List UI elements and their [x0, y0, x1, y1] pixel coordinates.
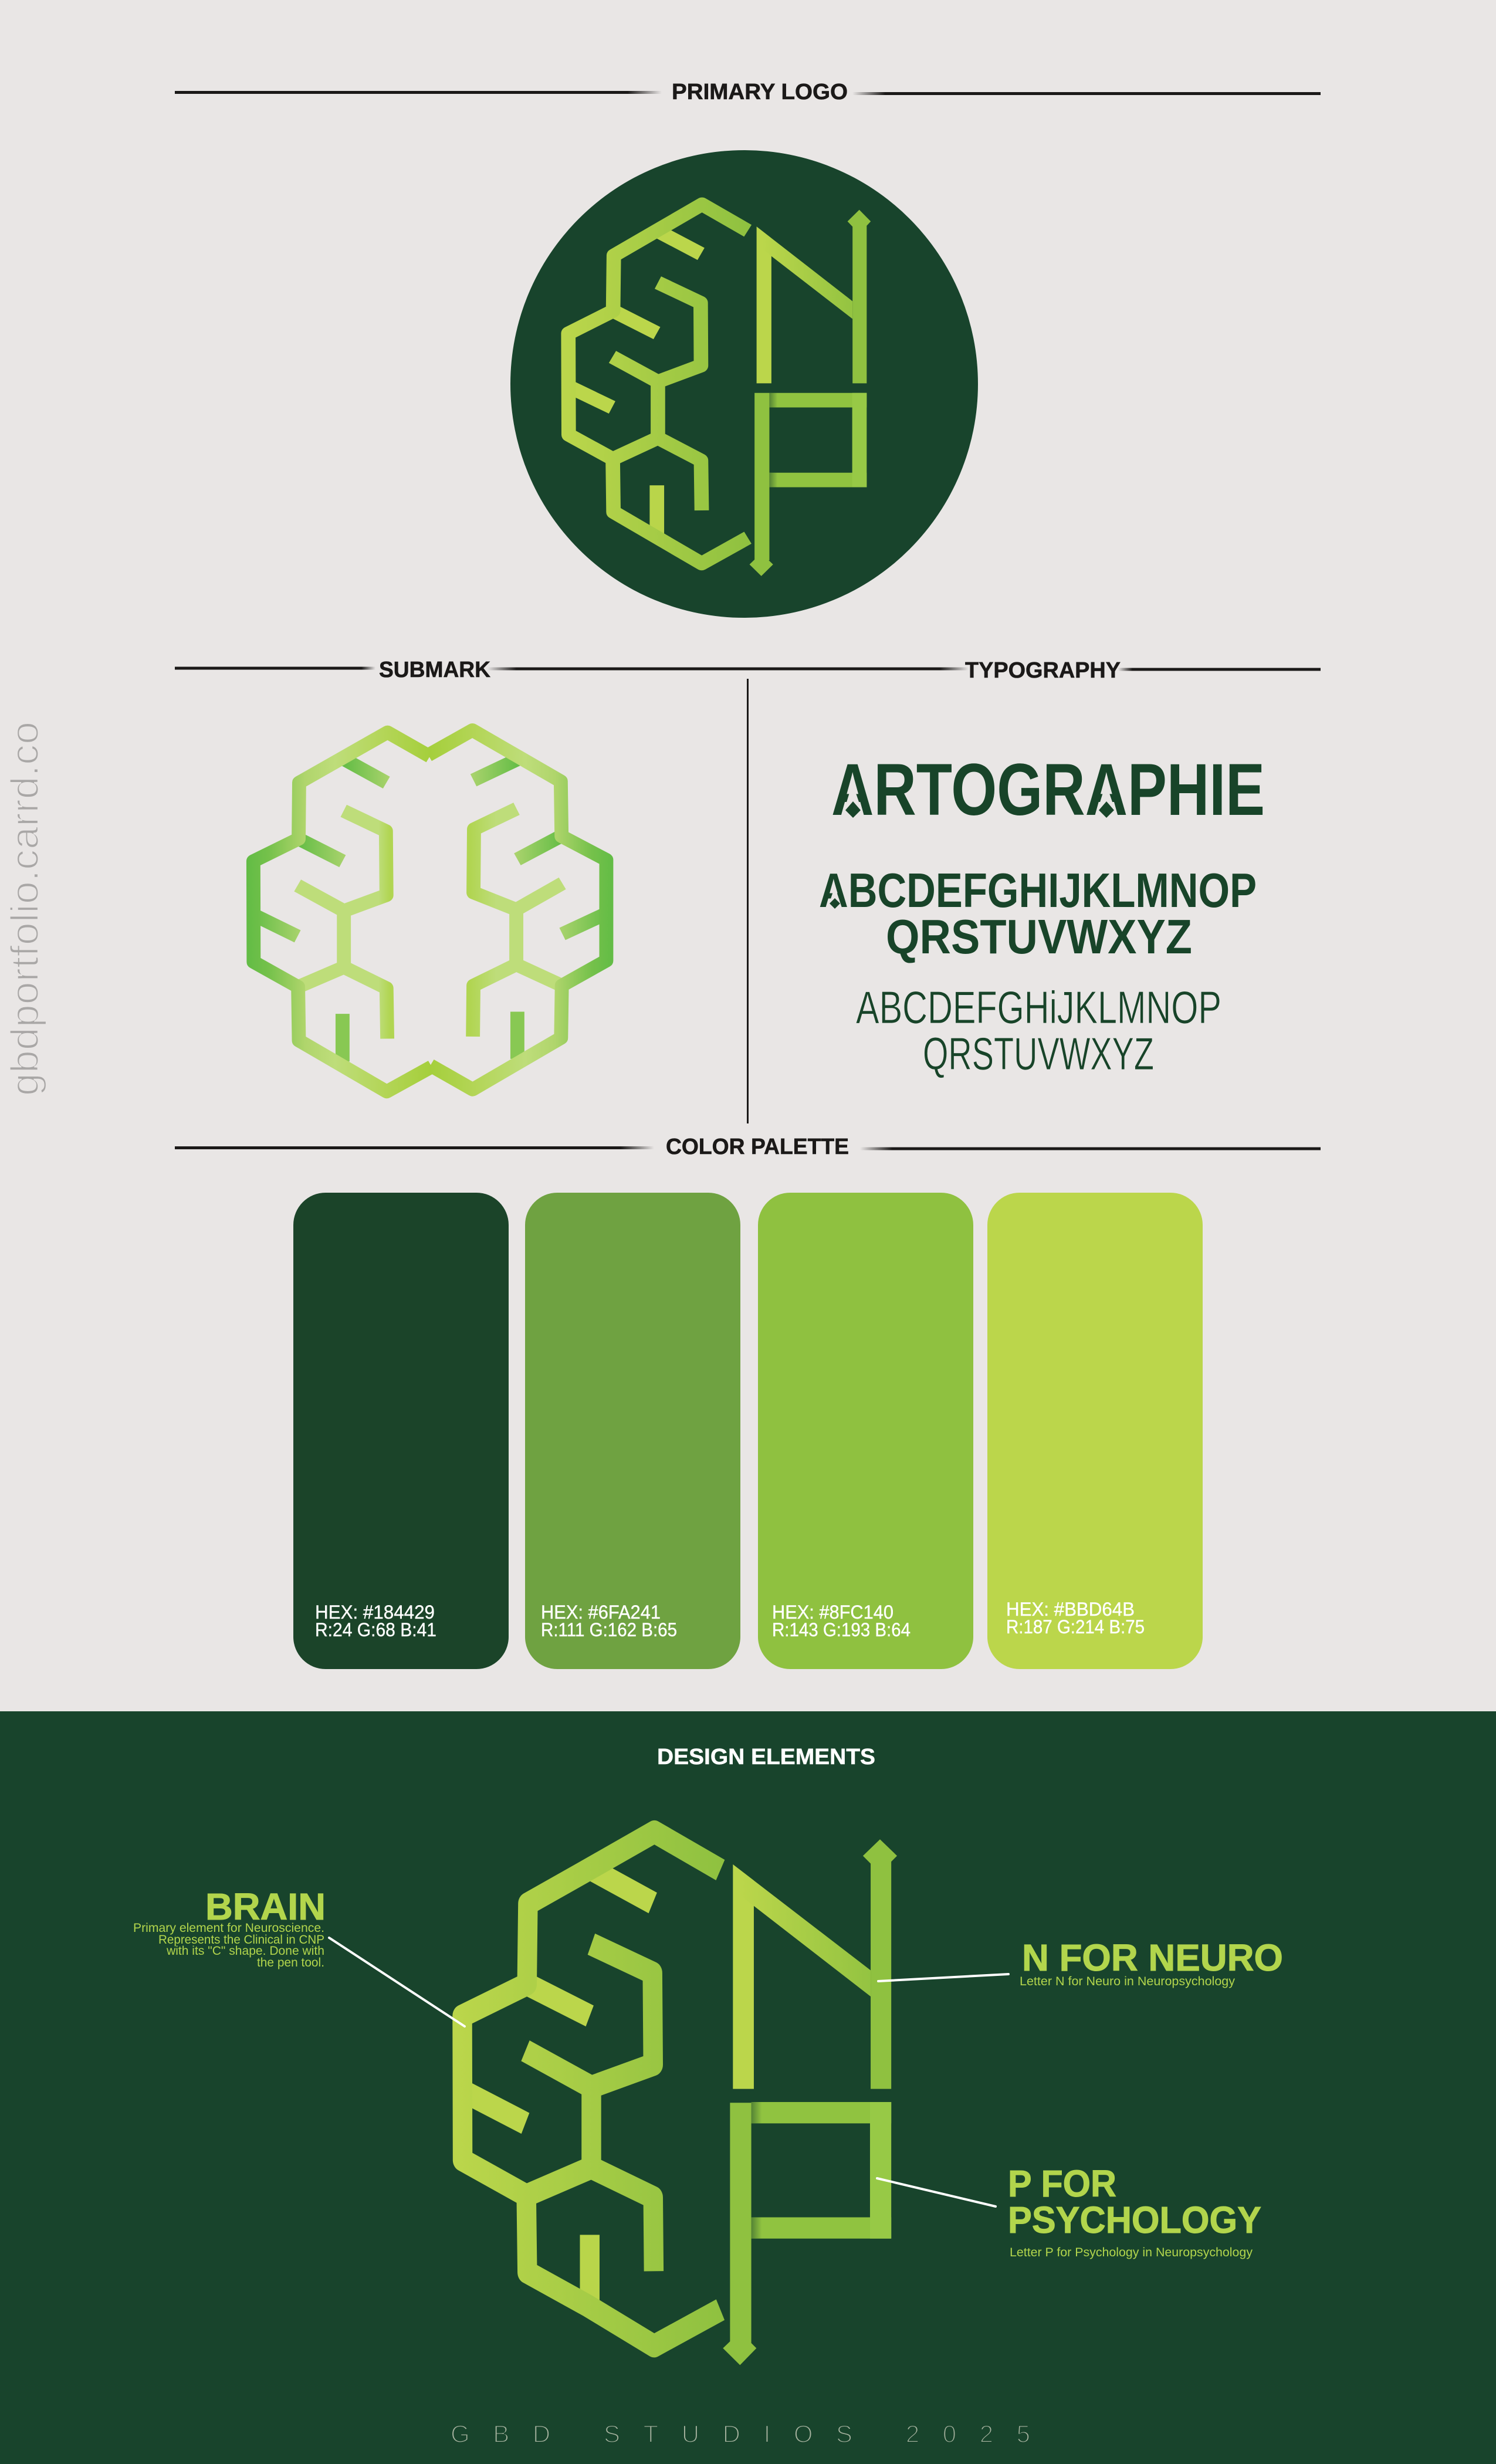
heading: design elements: DESIGN ELEMENTS: [657, 1745, 875, 1769]
bold alphabet: [819, 863, 1257, 964]
panel: swatch dark green: HEX: #184429: [315, 1602, 435, 1623]
callout: N for Neuro: [878, 1937, 1283, 1988]
panel: swatch mid green: HEX: #6FA241: [541, 1602, 661, 1623]
panel: swatch mid green: R:111 G:162 B:65: [541, 1619, 677, 1640]
heading: color palette: [175, 1135, 1321, 1159]
panel: design elements background: [0, 1711, 1496, 2464]
heading: submark and typography: [175, 658, 1321, 683]
panel: primary logo badge: [510, 150, 978, 618]
logo circle background: [510, 150, 978, 618]
panel: swatch lime: R:187 G:214 B:75: [1006, 1616, 1145, 1637]
footer credit: GBD STUDIOS 2025: [451, 2420, 1030, 2448]
divider between submark and typography: [747, 679, 749, 1123]
bold alphabet: QRSTUVWXYZ: [886, 909, 1192, 964]
typeface name: ARTOGRAPHIE: [831, 749, 1265, 831]
vertical watermark: portfolio url: gbdportfolio.carrd.co: [3, 722, 47, 1096]
callout: P for Psychology: PSYCHOLOGY: [1008, 2199, 1261, 2241]
callout: brain: with its "C" shape. Done with: [166, 1944, 324, 1958]
callout: brain: [133, 1886, 465, 2026]
callout: N for Neuro: Letter N for Neuro in Neuropsychology: [1020, 1975, 1236, 1988]
callout: brain: Primary element for Neuroscience.: [133, 1921, 324, 1935]
heading: submark and typography: SUBMARK: [379, 658, 491, 682]
callout: N for Neuro: N FOR NEURO: [1022, 1937, 1283, 1979]
typography samples: [819, 749, 1265, 1079]
callout: brain: Represents the Clinical in CNP: [158, 1933, 324, 1947]
logo mark: brain with N and P: [568, 204, 871, 576]
callout: P for Psychology: Letter P for Psychology in Neuropsychology: [1010, 2246, 1253, 2259]
panel: swatch lime: [987, 1193, 1203, 1669]
panel: swatch light green: HEX: #8FC140: [772, 1602, 893, 1623]
panel: swatch mid green: [525, 1193, 740, 1669]
callout: P for Psychology: [877, 2162, 1261, 2259]
callout: P for Psychology: P FOR: [1008, 2162, 1116, 2205]
callout: brain: BRAIN: [205, 1886, 326, 1928]
large logo construction: [462, 1832, 897, 2365]
heading: color palette: COLOR PALETTE: [666, 1135, 849, 1159]
panel: swatch light green: [758, 1193, 973, 1669]
heading: primary logo: [175, 80, 1321, 104]
panel: swatch dark green: [293, 1193, 509, 1669]
panel: swatch lime: HEX: #BBD64B: [1006, 1599, 1135, 1620]
heading: submark and typography: TYPOGRAPHY: [965, 658, 1121, 683]
panel: swatch light green: R:143 G:193 B:64: [772, 1619, 911, 1640]
panel: swatch dark green: R:24 G:68 B:41: [315, 1619, 436, 1640]
light alphabet: QRSTUVWXYZ: [923, 1028, 1154, 1079]
icon: submark brain: [253, 730, 606, 1092]
light alphabet: [856, 981, 1221, 1079]
bold alphabet: ABCDEFGHIJKLMNOP: [819, 863, 1257, 918]
callout: brain: the pen tool.: [257, 1956, 324, 1969]
light alphabet: ABCDEFGHiJKLMNOP: [856, 981, 1221, 1033]
heading: primary logo: PRIMARY LOGO: [672, 80, 848, 104]
